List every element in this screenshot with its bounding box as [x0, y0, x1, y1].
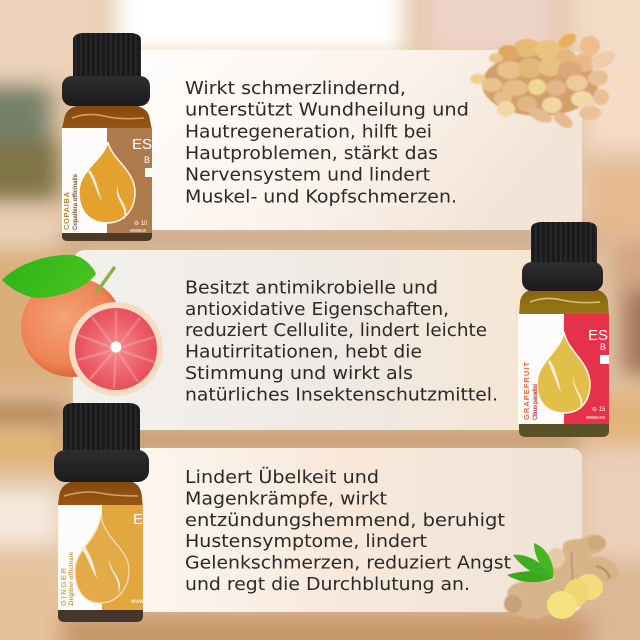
bottle label: S	[598, 327, 608, 344]
text: copaiba description: Hautproblemen, stärkt das	[185, 144, 438, 164]
bottle label: GRAPEFRUIT	[522, 362, 531, 420]
bottle: copaiba	[62, 33, 152, 241]
bottle cap	[531, 222, 597, 266]
stem	[97, 268, 114, 292]
bottle label: ⊖ 15	[592, 407, 606, 413]
bottle label: COPAIBA	[62, 191, 71, 230]
ginger slices	[575, 574, 603, 600]
bottle label: B	[144, 155, 150, 165]
bottle cap	[73, 33, 141, 80]
text: ginger description: entzündungshemmend, beruhigt	[185, 511, 505, 531]
bottle cap	[63, 403, 140, 454]
bottle glass	[58, 481, 143, 610]
bottle base	[58, 609, 143, 622]
text: ginger description: Lindert Übelkeit und	[185, 466, 379, 488]
text: grapefruit description: Stimmung und wirkt als	[185, 364, 413, 384]
bottle label: GINGER	[59, 567, 68, 606]
text: grapefruit description: Besitzt antimikrobielle und	[185, 278, 438, 298]
panel: grapefruit background card	[73, 250, 543, 430]
bottle base	[519, 424, 609, 437]
bottle label	[62, 128, 152, 234]
text: copaiba description: unterstützt Wundheilung und	[185, 101, 469, 121]
grapefruit slice	[69, 302, 163, 396]
bottle glass	[62, 105, 152, 233]
bottle base	[62, 232, 152, 241]
text: ginger description	[185, 466, 511, 595]
bottle: grapefruit	[518, 222, 609, 437]
leaves	[507, 569, 553, 582]
bottle label: Citrus paradisi	[533, 384, 539, 420]
text: copaiba description	[185, 79, 469, 207]
bottle label: S	[142, 136, 152, 153]
text: copaiba description: Hautregeneration, hilft bei	[185, 122, 432, 142]
bottle label: E	[133, 511, 143, 528]
panel: ginger background card	[100, 448, 582, 612]
bottle label: Zingiber officinale	[69, 551, 75, 606]
bottle label: ⊖ 10	[134, 221, 148, 227]
text: grapefruit description: reduziert Cellulite, lindert leichte	[185, 321, 487, 341]
bottle label	[518, 314, 609, 424]
bottle label	[58, 505, 145, 610]
bottle: ginger	[54, 403, 149, 622]
text: copaiba description: Wirkt schmerzlindernd,	[185, 79, 406, 99]
panel: copaiba background card	[100, 50, 582, 230]
bottle label: Copaifera officinalis	[73, 173, 79, 230]
text: ginger description: und regt die Durchblutung an.	[185, 575, 470, 595]
ginger root	[504, 535, 619, 619]
bottle label: B	[600, 342, 606, 352]
bottle label: E	[132, 136, 142, 153]
text: ginger description: Magenkrämpfe, wirkt	[185, 489, 387, 509]
text: ginger description: Hustensymptome, lindert	[185, 532, 427, 552]
text: grapefruit description: natürliches Insektenschutzmittel.	[185, 386, 498, 406]
leaf	[2, 255, 96, 298]
text: copaiba description: Muskel- und Kopfschmerzen.	[185, 187, 457, 207]
text: grapefruit description	[185, 278, 498, 406]
bottle label: www.es	[585, 415, 605, 421]
icon: grapefruit with leaf	[2, 255, 163, 396]
icon: copaiba resin cluster	[470, 30, 626, 131]
bottle label: www	[130, 599, 145, 605]
whole grapefruit	[21, 277, 123, 377]
bottle label: www.e	[129, 228, 146, 234]
text: ginger description: Gelenkschmerzen, reduziert Angst	[185, 554, 511, 574]
bottle label: E	[588, 327, 598, 344]
text: copaiba description: Nervensystem und lindert	[185, 166, 430, 186]
text: grapefruit description: antioxidative Eigenschaften,	[185, 300, 449, 320]
text: grapefruit description: Hautirritationen, hebt die	[185, 343, 422, 363]
bottle glass	[519, 288, 609, 425]
icon: ginger with leaves	[504, 535, 619, 619]
